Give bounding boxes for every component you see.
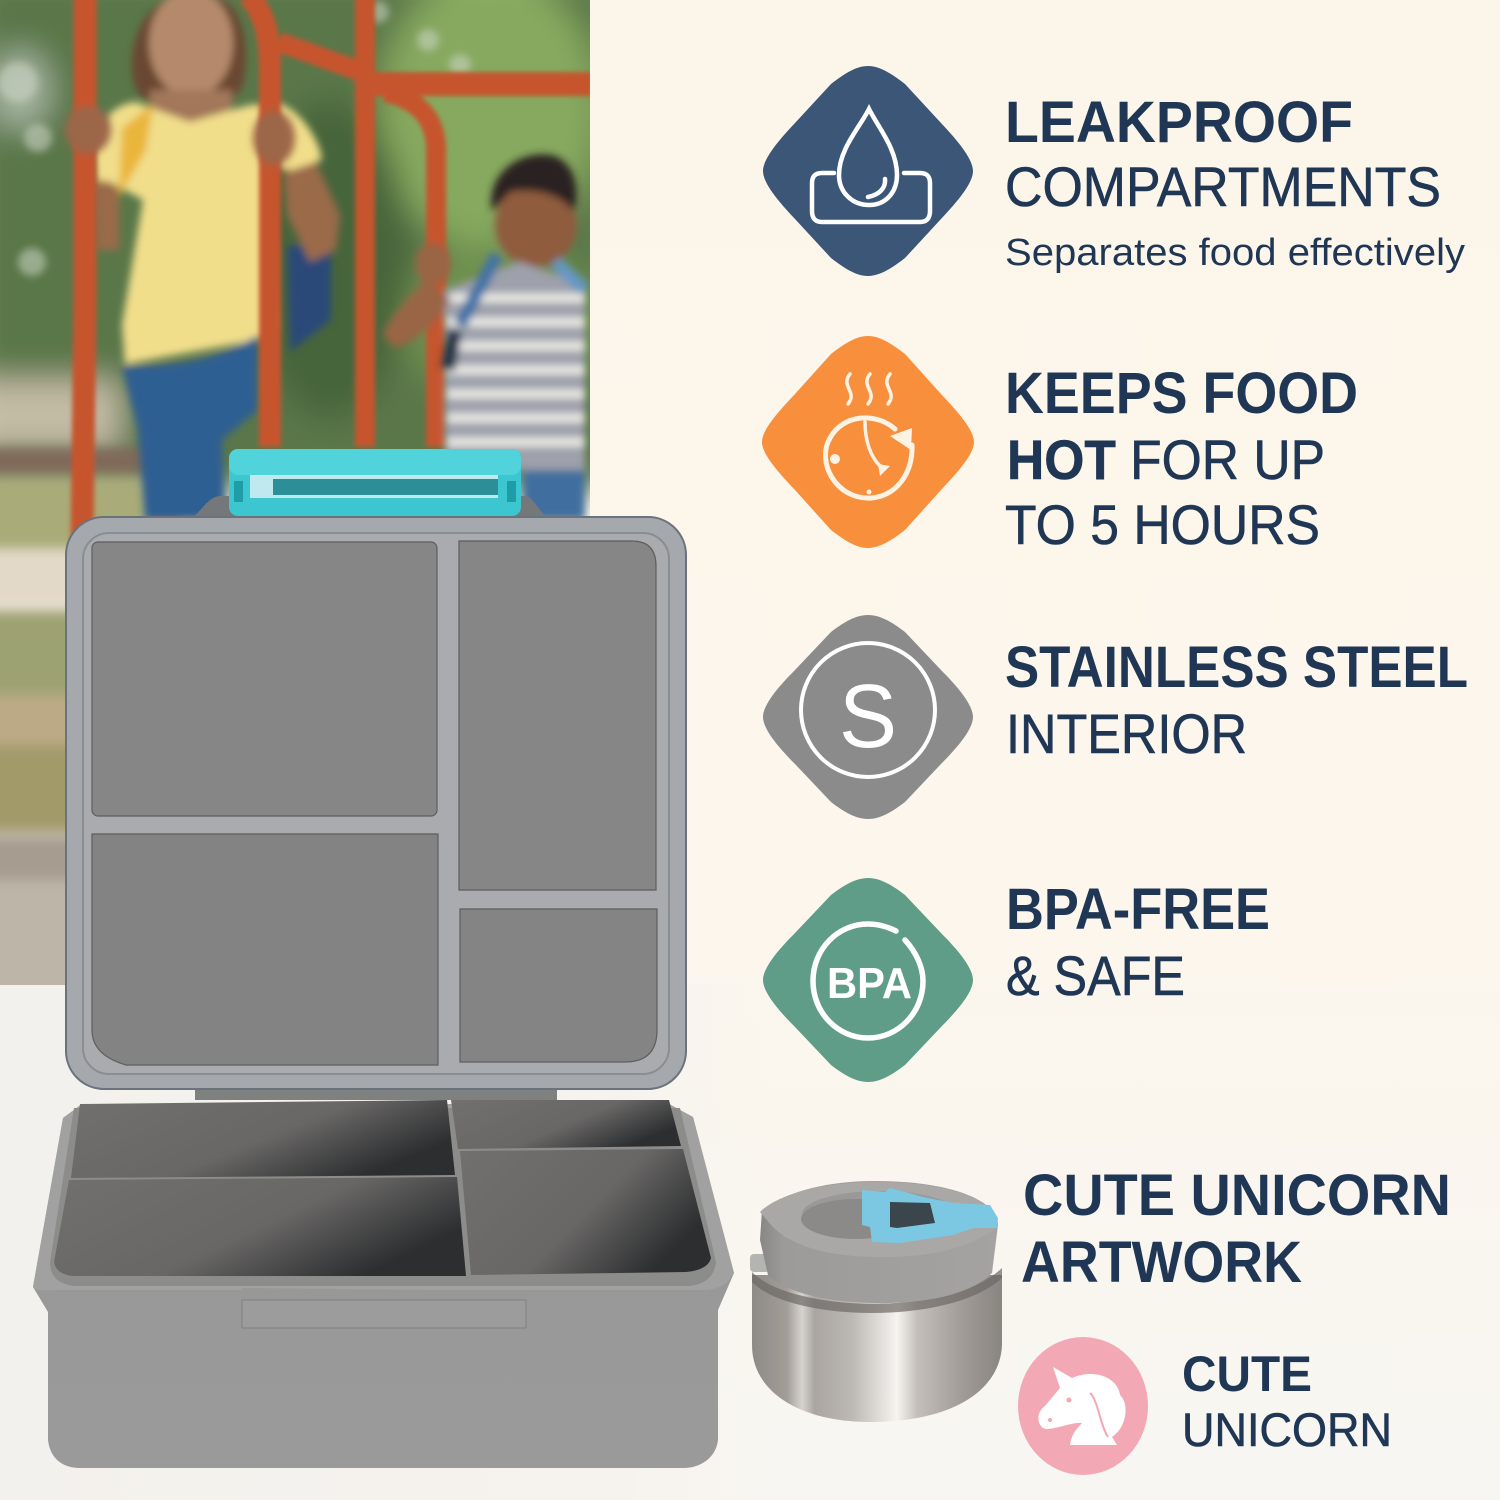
subheading: INTERIOR	[1006, 702, 1247, 765]
girl's hands	[65, 106, 295, 165]
jar lid top	[760, 1182, 998, 1257]
lower lunchbox tray	[33, 1100, 734, 1468]
jar lid side	[760, 1181, 998, 1303]
icon: BPA badge: BPA	[827, 959, 912, 1008]
icon: BPA badge	[763, 878, 973, 1082]
label line one: CUTE	[1182, 1346, 1312, 1402]
heading line two: ARTWORK	[1021, 1230, 1302, 1295]
icon: steaming clock	[762, 336, 974, 548]
heading line one: CUTE UNICORN	[1023, 1163, 1451, 1228]
lid compartment top left	[92, 542, 437, 816]
description: Separates food effectively	[1005, 232, 1465, 274]
heading: KEEPS FOOD	[1005, 361, 1358, 426]
jar lid opening	[802, 1191, 958, 1237]
lid inner groove	[83, 533, 669, 1074]
lid compartment bottom left	[92, 834, 438, 1065]
feature: keeps food hot	[762, 336, 1358, 556]
feature: BPA free	[763, 877, 1270, 1082]
jar under-lid shadow	[752, 1268, 1002, 1313]
bokeh	[0, 1, 471, 276]
jar lid tab	[750, 1254, 770, 1272]
label line two: UNICORN	[1182, 1403, 1392, 1456]
line three: TO 5 HOURS	[1005, 493, 1320, 556]
line two: HOT FOR UP	[1007, 428, 1325, 491]
back poles	[375, 105, 395, 447]
front latch	[242, 1288, 526, 1327]
girl on the left	[94, 0, 340, 520]
icon: unicorn badge	[1018, 1337, 1148, 1475]
blue clip	[862, 1188, 998, 1243]
open lunchbox lid	[66, 496, 686, 1100]
tray compartment: back right	[451, 1100, 681, 1149]
subheading: COMPARTMENTS	[1005, 155, 1441, 218]
turquoise handle	[229, 449, 521, 516]
tray compartment: front right	[460, 1149, 711, 1275]
feature: cute unicorn artwork	[1018, 1163, 1451, 1475]
lid compartment bottom right	[460, 909, 657, 1062]
hinge	[195, 1085, 557, 1100]
playground photo	[0, 0, 620, 1005]
lid compartment top right	[459, 541, 656, 890]
icon: water drop in compartment	[763, 66, 973, 276]
steel food jar	[750, 1181, 1002, 1422]
lid frame	[66, 517, 686, 1089]
photo backdrop	[0, 0, 620, 1005]
ground bands	[0, 448, 180, 1005]
feature: leakproof	[763, 66, 1465, 276]
handle slot	[250, 475, 498, 498]
jar body	[752, 1275, 1002, 1422]
table surface	[0, 985, 780, 1500]
lid tabs	[185, 496, 552, 520]
icon: S badge: S	[839, 667, 897, 767]
tray compartment: front left	[54, 1177, 466, 1276]
subheading: & SAFE	[1006, 944, 1185, 1007]
tray upper rim	[33, 1104, 734, 1290]
feature: stainless steel	[763, 615, 1468, 819]
tray lip	[50, 1108, 716, 1286]
icon: S badge	[763, 615, 973, 819]
heading: LEAKPROOF	[1005, 90, 1353, 155]
heading: BPA-FREE	[1006, 877, 1270, 942]
boy on the right	[383, 154, 585, 520]
playground bars	[82, 0, 592, 548]
tray compartment: back left	[71, 1100, 455, 1178]
tray rim and body	[33, 1104, 734, 1468]
